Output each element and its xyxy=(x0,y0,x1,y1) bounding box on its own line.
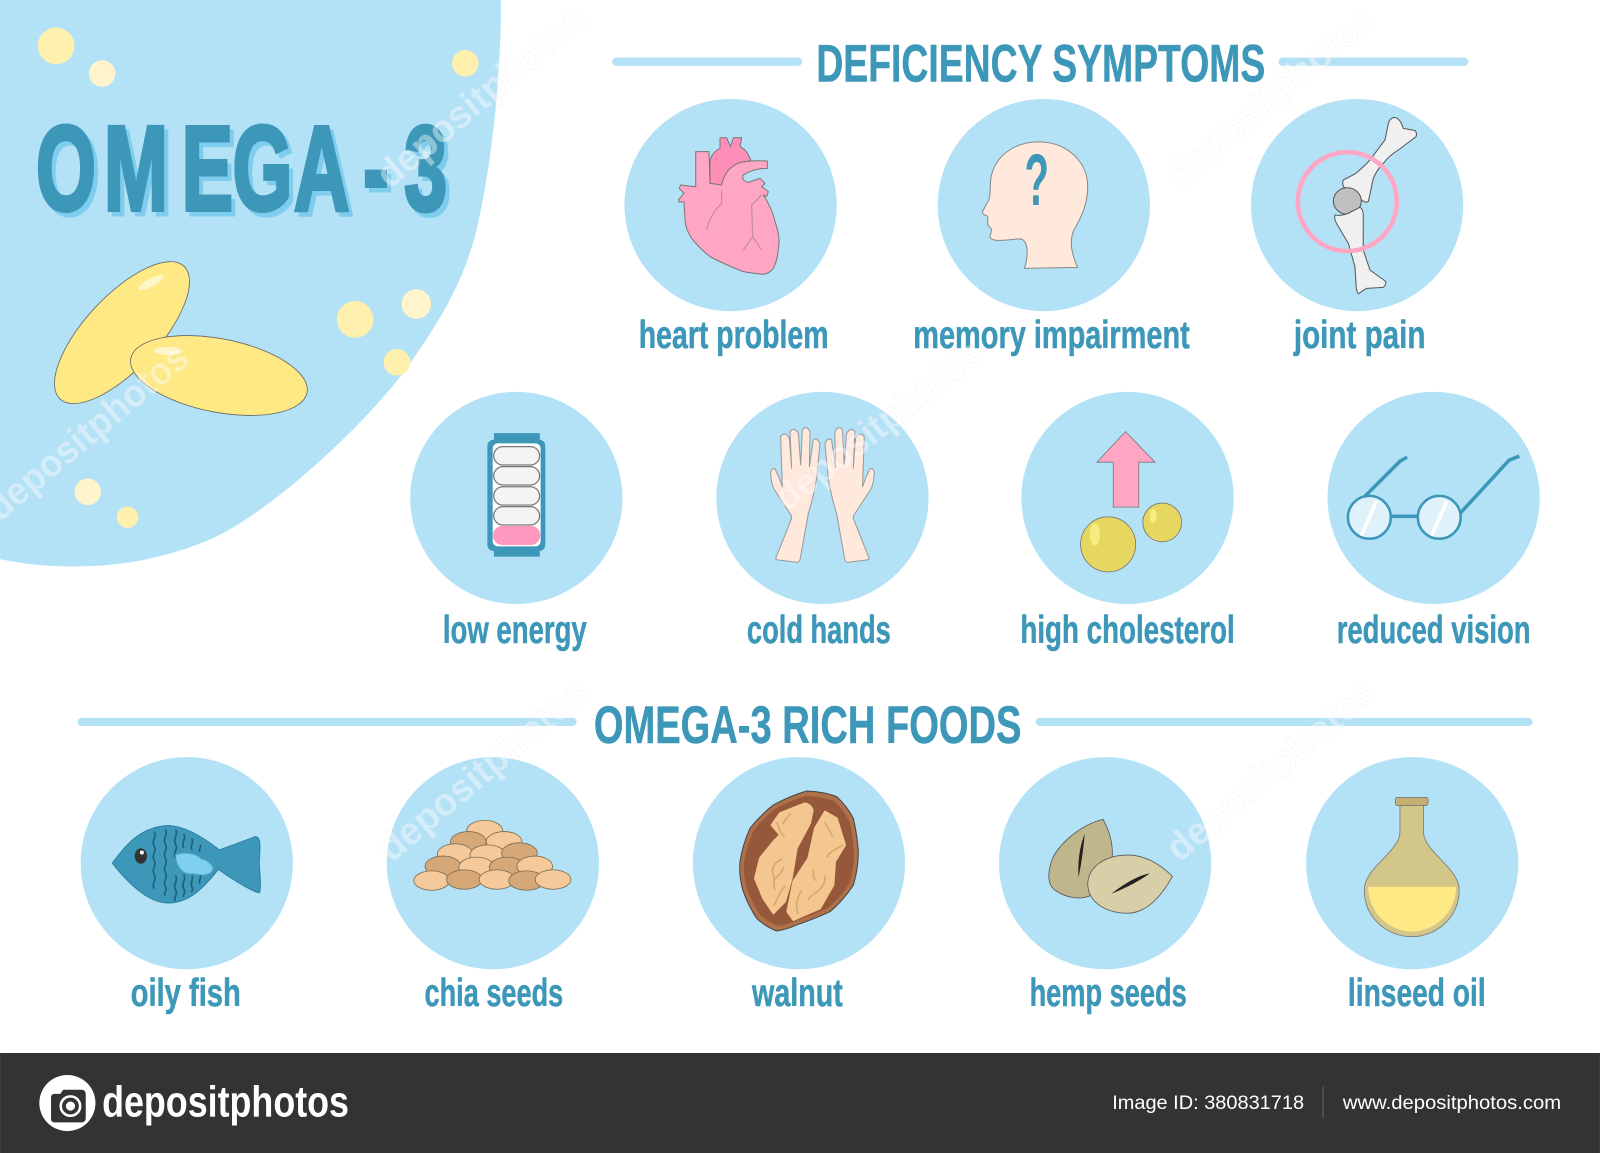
website url: www.depositphotos.com xyxy=(1342,1092,1561,1114)
title: OMEGA-3: OMEGA-3 xyxy=(36,102,447,236)
icon: hemp seeds xyxy=(1049,819,1172,913)
footer bar xyxy=(0,1053,1600,1153)
icon: depositphotos logo xyxy=(39,1075,95,1131)
icon: omega-3 capsules xyxy=(33,241,314,429)
icon: head with question mark: ? xyxy=(1024,138,1049,221)
label: memory impairment xyxy=(913,314,1190,357)
watermarks: depositphotos xyxy=(1158,670,1385,870)
panel: omega-3 hero xyxy=(0,0,501,566)
icon: arrow and fat globules xyxy=(1081,432,1182,572)
panel: walnut xyxy=(693,757,905,1015)
panel: heart problem xyxy=(624,99,837,357)
label: oily fish xyxy=(131,972,241,1015)
label: hemp seeds xyxy=(1030,972,1187,1015)
icon: heart xyxy=(678,138,779,274)
panel: hemp seeds xyxy=(999,757,1211,1015)
icon: head with question mark xyxy=(982,138,1088,268)
panel: oily fish xyxy=(81,757,293,1015)
title: OMEGA-3: OMEGA-3 xyxy=(40,106,451,240)
label: chia seeds xyxy=(425,972,563,1015)
image id: Image ID: 380831718 xyxy=(1112,1092,1304,1114)
watermarks xyxy=(0,0,1385,870)
icon: oil flask xyxy=(1364,797,1459,937)
panel: linseed oil xyxy=(1306,757,1518,1015)
icon: walnut xyxy=(740,791,858,931)
heading: omega-3 rich foods: OMEGA-3 RICH FOODS xyxy=(594,696,1021,755)
icon: hands xyxy=(771,428,874,562)
panel: memory impairment xyxy=(913,99,1190,357)
brand name: depositphotos xyxy=(102,1077,349,1126)
panel: joint pain xyxy=(1251,99,1463,357)
panel: high cholesterol xyxy=(1020,392,1235,652)
watermarks: depositphotos xyxy=(767,332,990,519)
icon: fish xyxy=(112,825,260,903)
icon: joint xyxy=(1298,117,1417,294)
icon: chia seeds pile xyxy=(414,820,571,890)
icon: battery xyxy=(487,433,545,557)
label: walnut xyxy=(751,972,843,1015)
label: low energy xyxy=(443,609,587,652)
panel: low energy xyxy=(410,392,622,652)
label: cold hands xyxy=(747,609,891,652)
panel: chia seeds xyxy=(387,757,599,1015)
panel: reduced vision xyxy=(1328,392,1540,652)
label: heart problem xyxy=(639,314,829,357)
label: linseed oil xyxy=(1348,972,1486,1015)
panel: cold hands xyxy=(716,392,929,652)
icon: glasses xyxy=(1348,456,1519,539)
hero background shape xyxy=(0,0,501,566)
heading: omega-3 rich foods xyxy=(78,696,1533,755)
label: joint pain xyxy=(1293,314,1425,357)
heading: deficiency symptoms: DEFICIENCY SYMPTOMS xyxy=(816,35,1265,94)
watermarks: depositphotos xyxy=(370,670,597,870)
label: high cholesterol xyxy=(1020,609,1235,652)
decorative oil droplets xyxy=(38,28,479,528)
